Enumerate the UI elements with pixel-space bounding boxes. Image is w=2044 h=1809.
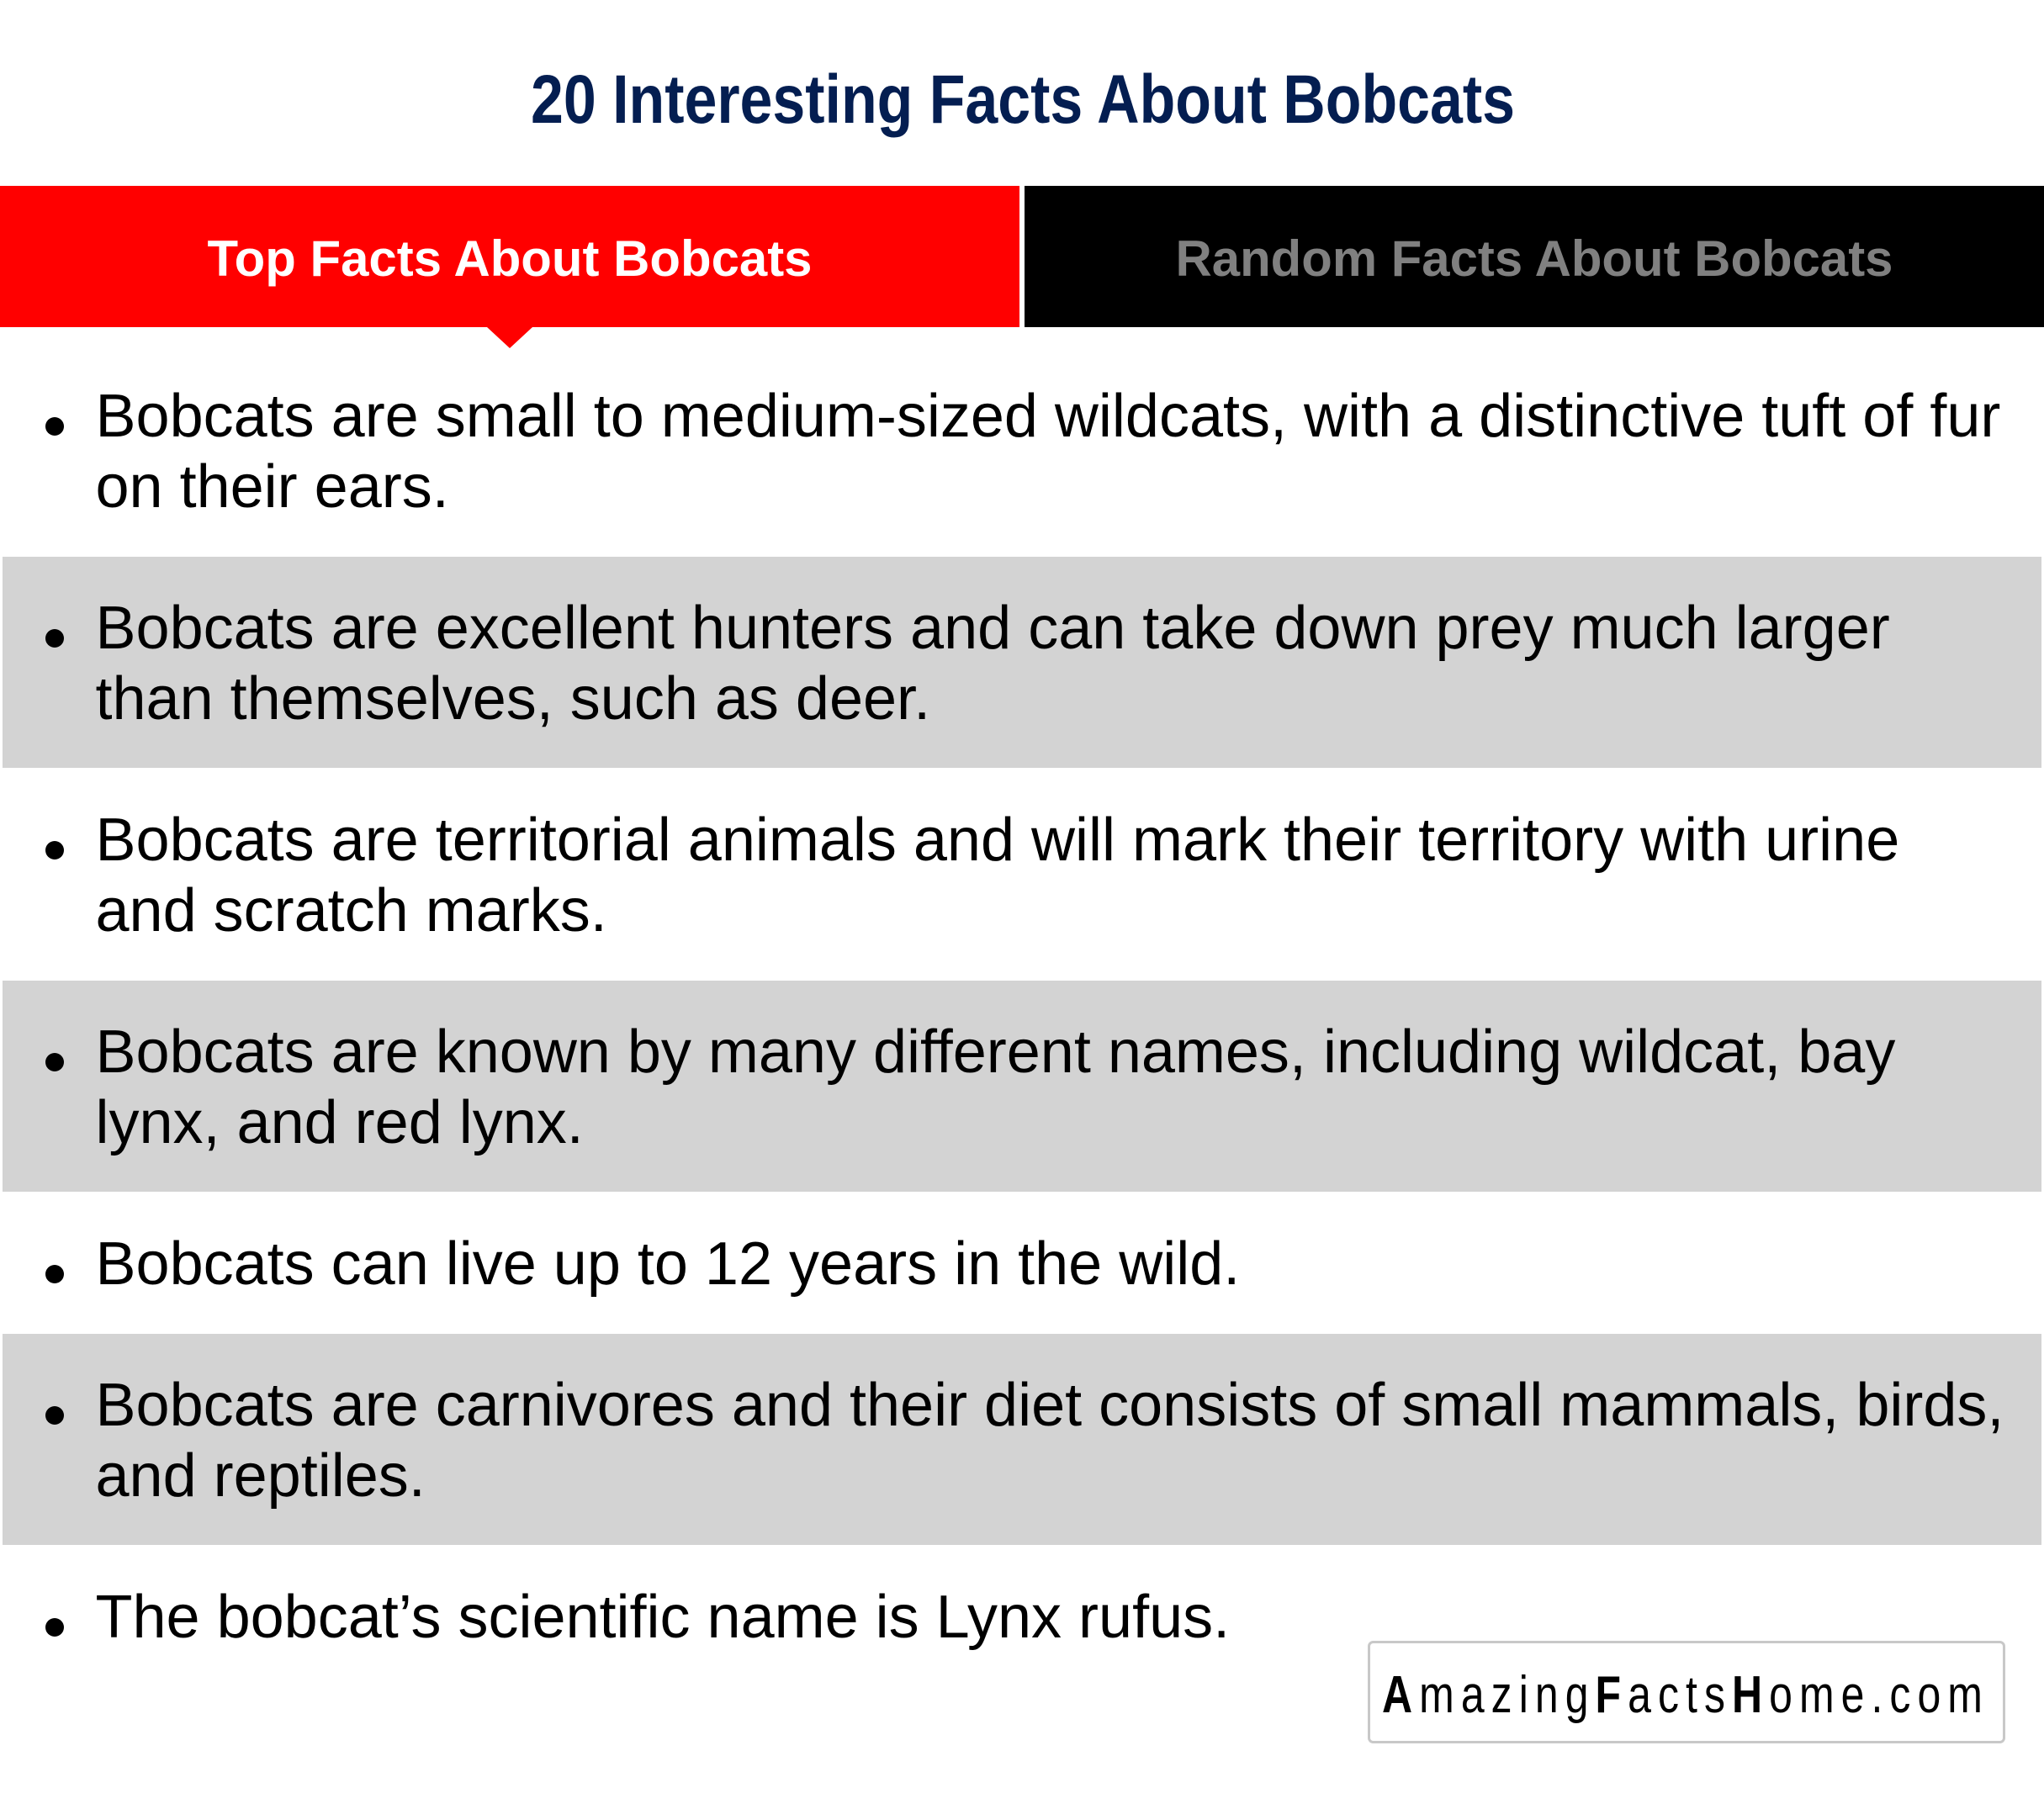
fact 2: than themselves, such as deer.	[96, 665, 930, 733]
title: 20 Interesting Facts About Bobcats	[531, 61, 1515, 138]
fact 6: and reptiles.	[96, 1442, 426, 1510]
fact 4	[3, 981, 2041, 1192]
fact 6	[3, 1334, 2041, 1545]
fact 3: Bobcats are territorial animals and will mark their territory with urine	[96, 807, 1899, 874]
fact 5: Bobcats can live up to 12 years in the wild.	[96, 1230, 1240, 1298]
fact 2	[3, 557, 2041, 768]
tab: random facts: Random Facts About Bobcats	[1176, 230, 1893, 287]
fact 1	[45, 383, 2000, 521]
watermark: AmazingFactsHome.com	[1369, 1642, 2004, 1743]
fact 2: Bobcats are excellent hunters and can take down prey much larger	[96, 595, 1890, 662]
tab: top facts (active): Top Facts About Bobcats	[207, 230, 813, 287]
fact 1: Bobcats are small to medium-sized wildcats, with a distinctive tuft of fur	[96, 383, 2000, 450]
fact 1: on their ears.	[96, 453, 449, 521]
fact 3	[45, 807, 1899, 944]
fact 6: Bobcats are carnivores and their diet consists of small mammals, birds,	[96, 1372, 2004, 1439]
tab: random facts	[1025, 186, 2044, 327]
fact 3: and scratch marks.	[96, 877, 607, 944]
fact 7: The bobcat’s scientific name is Lynx rufus.	[96, 1584, 1230, 1651]
tab: top facts (active)	[0, 186, 1019, 348]
fact 4: Bobcats are known by many different names, including wildcat, bay	[96, 1018, 1895, 1086]
fact 4: lynx, and red lynx.	[96, 1089, 584, 1156]
watermark: AmazingFactsHome.com: AmazingFactsHome.com	[1382, 1666, 1989, 1724]
